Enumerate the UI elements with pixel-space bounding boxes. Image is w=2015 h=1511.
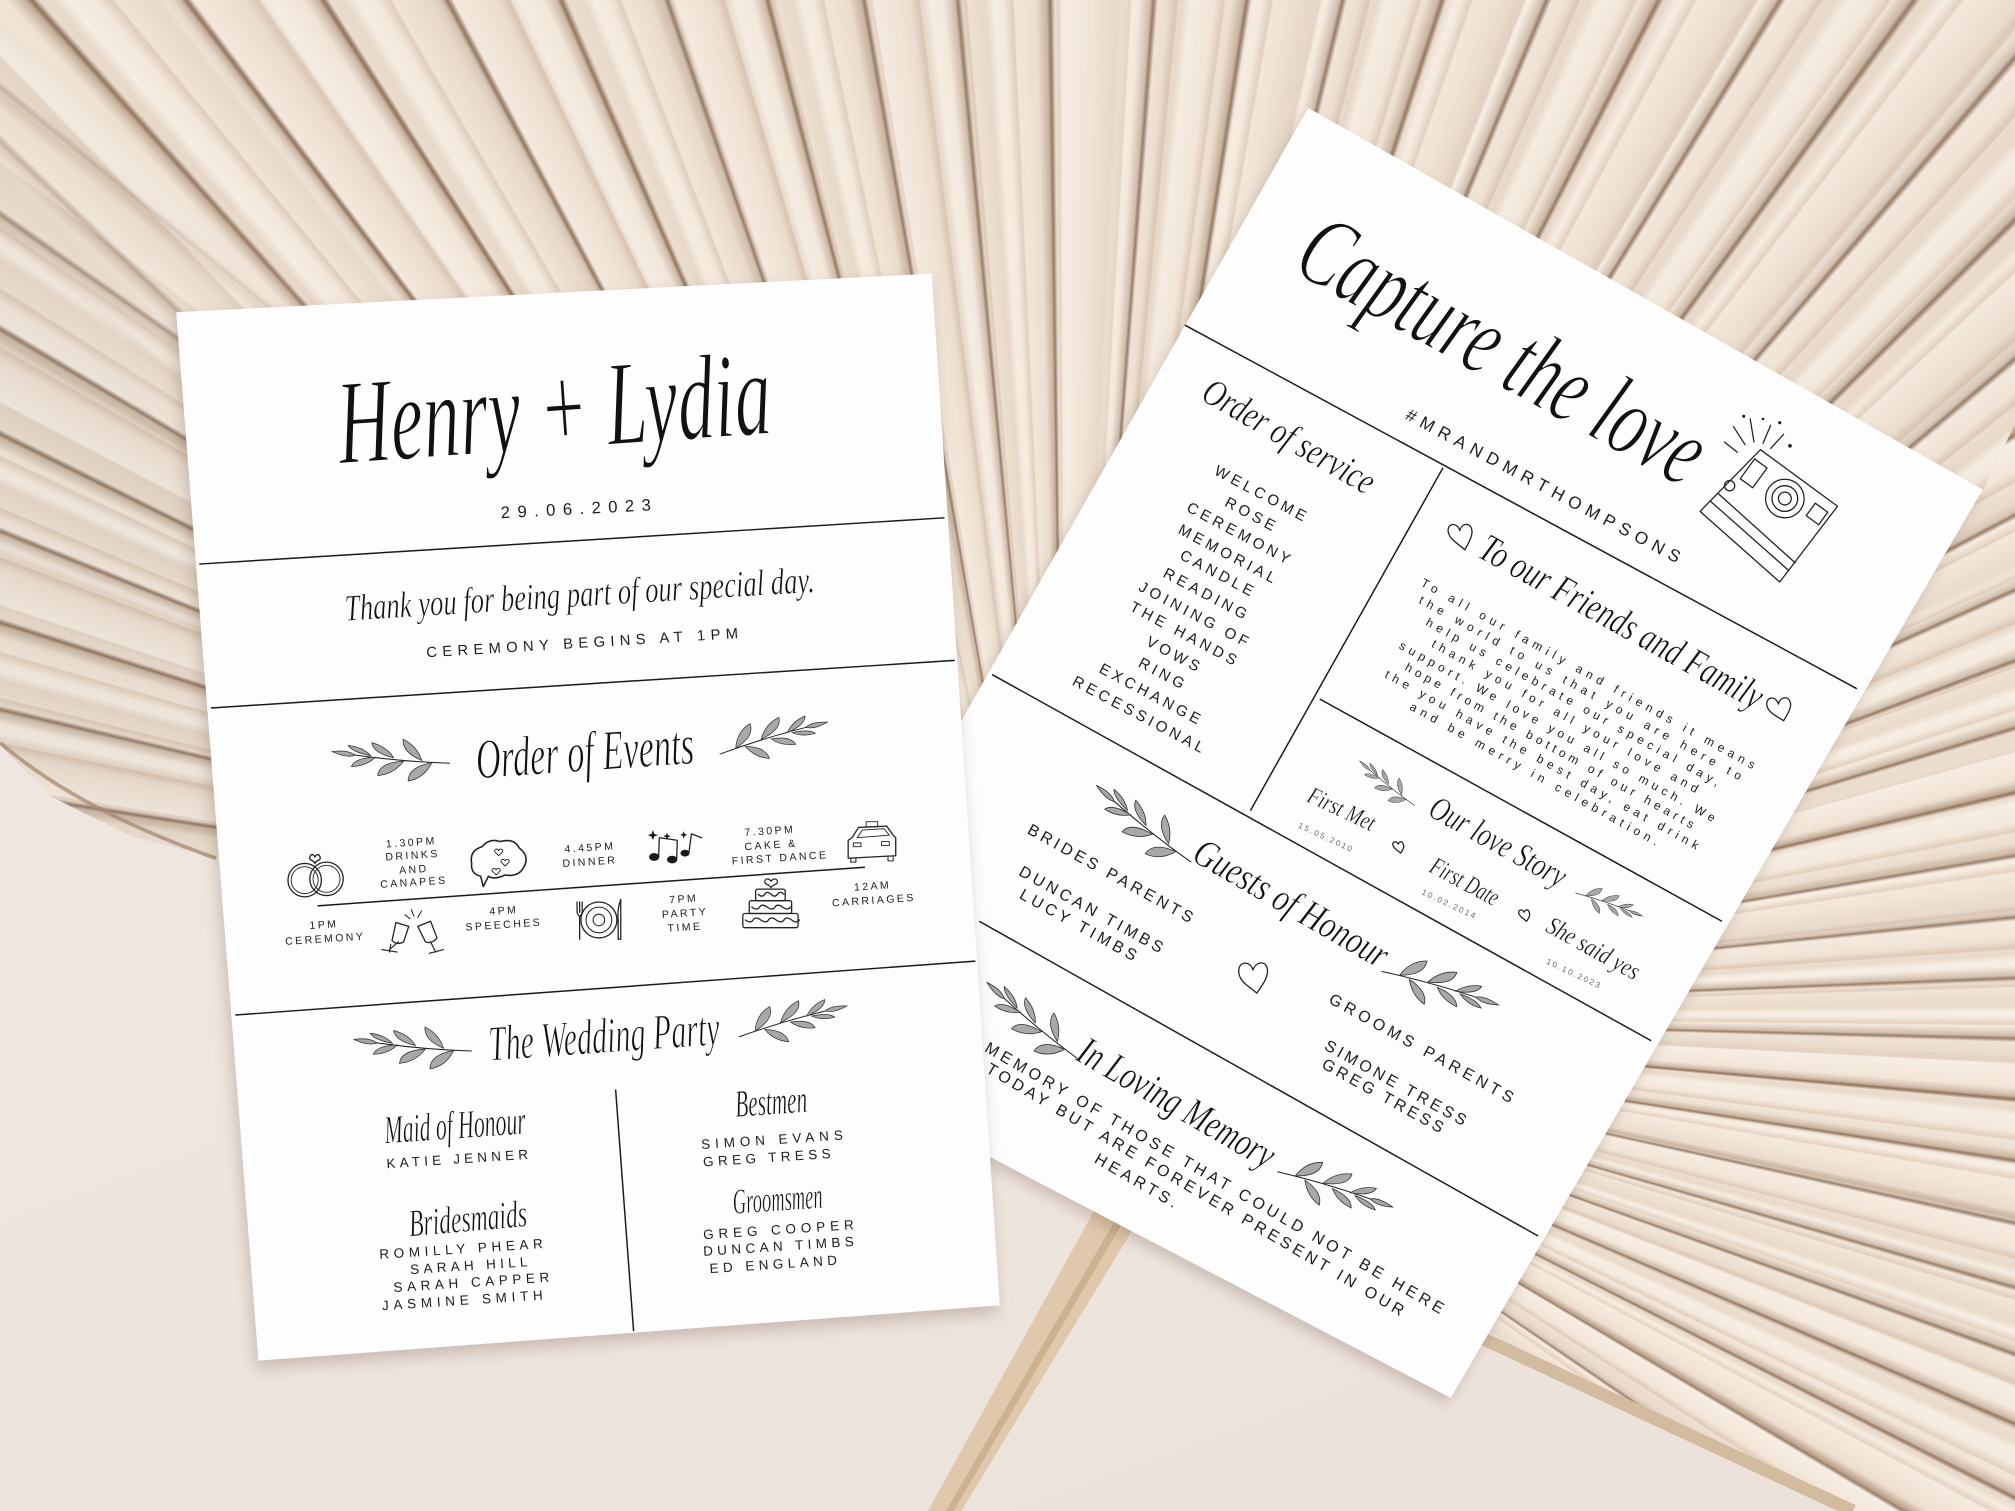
label: 7.30pm cake: CAKE & (744, 838, 798, 853)
list: order of service: RECESSIONAL (1070, 673, 1210, 758)
body text: thank you message: help us celebrate our special day, (1424, 615, 1725, 791)
column: bridal party: SARAH HILL (410, 1254, 531, 1277)
sprig: love story right (1572, 881, 1647, 927)
sprig: events left (330, 732, 452, 785)
text: memorial message: HEARTS. (1091, 1150, 1181, 1212)
column: bridal party: JASMINE SMITH (381, 1287, 547, 1313)
block: grooms parents: GROOMS PARENTS (1326, 990, 1517, 1107)
sprig: guests left (1082, 770, 1204, 880)
timeline: love story milestones (1297, 782, 1645, 991)
timeline: order of events (285, 822, 916, 953)
hashtag: #MRANDMRTHOMPSONS (1402, 404, 1684, 567)
palm fan pleats: top (0, 0, 2015, 858)
column: bridal party (379, 1099, 553, 1313)
block: brides parents: LUCY TIMBS (1016, 885, 1140, 965)
timeline: love story milestones: 10.10.2023 (1545, 957, 1603, 991)
label: 1.30pm drinks: DRINKS (385, 848, 440, 864)
heading: to our friends and family: To our Friends and Family (1472, 525, 1772, 718)
icon: instant camera (1700, 415, 1838, 582)
ceremony time: CEREMONY BEGINS AT 1PM (426, 626, 739, 661)
label: 1.30pm drinks (380, 835, 448, 891)
block: brides parents: DUNCAN TIMBS (1016, 863, 1166, 957)
label: 7.30pm cake: FIRST DANCE (731, 849, 829, 867)
label: 4pm speeches (465, 904, 543, 934)
label: 1.30pm drinks: 1.30PM (386, 835, 437, 851)
column: groom's party: SIMON EVANS (701, 1127, 847, 1152)
list: order of service (1070, 462, 1312, 758)
body text: thank you message: To all our family and friends it means (1419, 576, 1760, 773)
column: bridal party: KATIE JENNER (386, 1147, 532, 1171)
timeline: love story milestones: 15.05.2010 (1297, 821, 1355, 855)
list: order of service: CEREMONY (1184, 499, 1296, 570)
column: groom's party: GREG COOPER (703, 1217, 857, 1242)
list: order of service: READING (1160, 565, 1253, 625)
section dividers (199, 518, 975, 1331)
palm fan pleats: right (1490, 424, 2015, 1511)
list: order of service: JOINING OF (1136, 579, 1254, 652)
list: order of service: ROSE (1222, 494, 1281, 536)
heading: in loving memory: In Loving Memory (1069, 1027, 1285, 1178)
label: 1pm ceremony (285, 918, 366, 948)
label: 1.30pm drinks: CANAPES (380, 874, 448, 891)
sprig: party left (352, 1020, 474, 1073)
card sheet (778, 108, 1983, 1398)
heading: the wedding party: The Wedding Party (487, 1000, 722, 1072)
icon: champagne toast (382, 910, 443, 953)
label: 7pm party time (662, 892, 708, 935)
title: henry and lydia: Henry + Lydia (331, 327, 775, 491)
label: 7pm party time: TIME (667, 921, 703, 935)
body text: thank you message: hope from the bottom of our hearts (1403, 660, 1699, 833)
card sheet (176, 274, 1000, 1361)
body text: thank you message: thank you for all your love and (1429, 637, 1704, 797)
fan stem (928, 1200, 1140, 1511)
column: bridal party: SARAH CAPPER (393, 1270, 553, 1295)
body text: thank you message: support. We love you all so much. We (1397, 638, 1721, 826)
column: groom's party: DUNCAN TIMBS (703, 1234, 857, 1259)
section dividers (979, 325, 1857, 1236)
icon: rings (288, 855, 343, 897)
column: groom's party (701, 1079, 857, 1276)
text: memorial message: TODAY BUT ARE FOREVER PRESENT IN OUR (983, 1060, 1407, 1320)
list: order of service: EXCHANGE (1096, 660, 1207, 730)
list: order of service: RING (1135, 655, 1190, 695)
icon: wedding cake (743, 879, 799, 928)
card: henry and lydia programme (176, 274, 1000, 1361)
body text: thank you message: the world to us that you are here to (1417, 593, 1747, 785)
label: 12am carriages: CARRIAGES (832, 892, 916, 909)
label: 1pm ceremony: 1PM (309, 918, 339, 932)
block: grooms parents: SIMONE TRESS (1321, 1037, 1470, 1130)
body text: thank you message: the you have the best day, eat drink (1383, 667, 1704, 854)
icon: heart left of friends heading (1448, 524, 1472, 550)
sprig: memory left (973, 967, 1092, 1077)
label: 1pm ceremony: CEREMONY (285, 931, 366, 948)
heading: order of service: Order of service (1195, 370, 1383, 503)
fan lower edge shadow (0, 743, 216, 858)
thank you line: Thank you for being part of our special day. (344, 560, 816, 630)
label: 7.30pm cake (731, 824, 829, 867)
icon: music notes (648, 830, 702, 863)
label: 7pm party time: PARTY (662, 906, 708, 921)
body text: thank you message (1383, 576, 1760, 854)
timeline: love story milestones: 10.02.2014 (1420, 888, 1479, 921)
sprig: events right (714, 702, 833, 772)
column: groom's party: ED ENGLAND (709, 1252, 841, 1276)
sprig: memory right (1272, 1150, 1399, 1226)
text: memorial message: MEMORY OF THOSE THAT COULD NOT BE HERE (982, 1039, 1447, 1318)
label: 4.45pm dinner: 4.45PM (564, 840, 616, 856)
list: order of service: WELCOME (1211, 462, 1312, 527)
list: order of service: THE HANDS (1127, 599, 1243, 671)
timeline: love story milestones: First Met (1303, 782, 1381, 837)
column: groom's party: Groomsmen (731, 1176, 824, 1222)
body text: thank you message: and be merry in celebration. (1407, 700, 1664, 850)
column: bridal party: ROMILLY PHEAR (379, 1236, 547, 1262)
icon: plate and cutlery (577, 899, 621, 939)
icon: taxi (848, 822, 896, 862)
heading: guests of honour: Guests of Honour (1186, 830, 1397, 977)
icon: speech cloud (471, 840, 526, 887)
label: 7pm party time: 7PM (669, 892, 699, 906)
block: brides parents: BRIDES PARENTS (1024, 821, 1196, 927)
date: 29.06.2023 (500, 495, 651, 522)
label: 4.45pm dinner: DINNER (562, 854, 618, 870)
timeline: love story milestones: She said yes (1541, 911, 1645, 986)
list: order of service: MEMORIAL (1175, 521, 1282, 589)
sprig: guests right (1376, 950, 1505, 1024)
icon: center heart (1239, 963, 1268, 993)
label: 4pm speeches: 4PM (489, 904, 519, 918)
icon: heart right of friends heading (1767, 698, 1791, 721)
column: groom's party: GREG TRESS (703, 1146, 834, 1169)
label: 12am carriages: 12AM (854, 879, 892, 894)
heading: our love story: Our love Story (1423, 788, 1574, 896)
title: capture the love: Capture the love (1279, 191, 1728, 508)
palm fan pleats: left (0, 60, 306, 858)
label: 7.30pm cake: 7.30PM (744, 824, 796, 839)
block: grooms parents: GREG TRESS (1319, 1055, 1447, 1137)
timeline: love story milestones: First Date (1425, 851, 1505, 912)
list: order of service: VOWS (1143, 633, 1206, 677)
column: bridal party: Bridesmaids (407, 1193, 529, 1245)
heading: order of events: Order of Events (474, 714, 696, 791)
card: capture the love (778, 108, 1983, 1398)
label: 4.45pm dinner (562, 840, 618, 870)
list: order of service: CANDLE (1177, 547, 1260, 602)
column: bridal party: Maid of Honour (382, 1099, 527, 1152)
label: 1.30pm drinks: AND (399, 863, 429, 877)
column: groom's party: Bestmen (734, 1079, 808, 1126)
sprig: party right (733, 986, 852, 1054)
label: 4pm speeches: SPEECHES (465, 917, 543, 934)
sprig: love story left (1351, 752, 1422, 816)
label: 12am carriages (832, 879, 916, 909)
fan lower right edge (1478, 1336, 1853, 1511)
